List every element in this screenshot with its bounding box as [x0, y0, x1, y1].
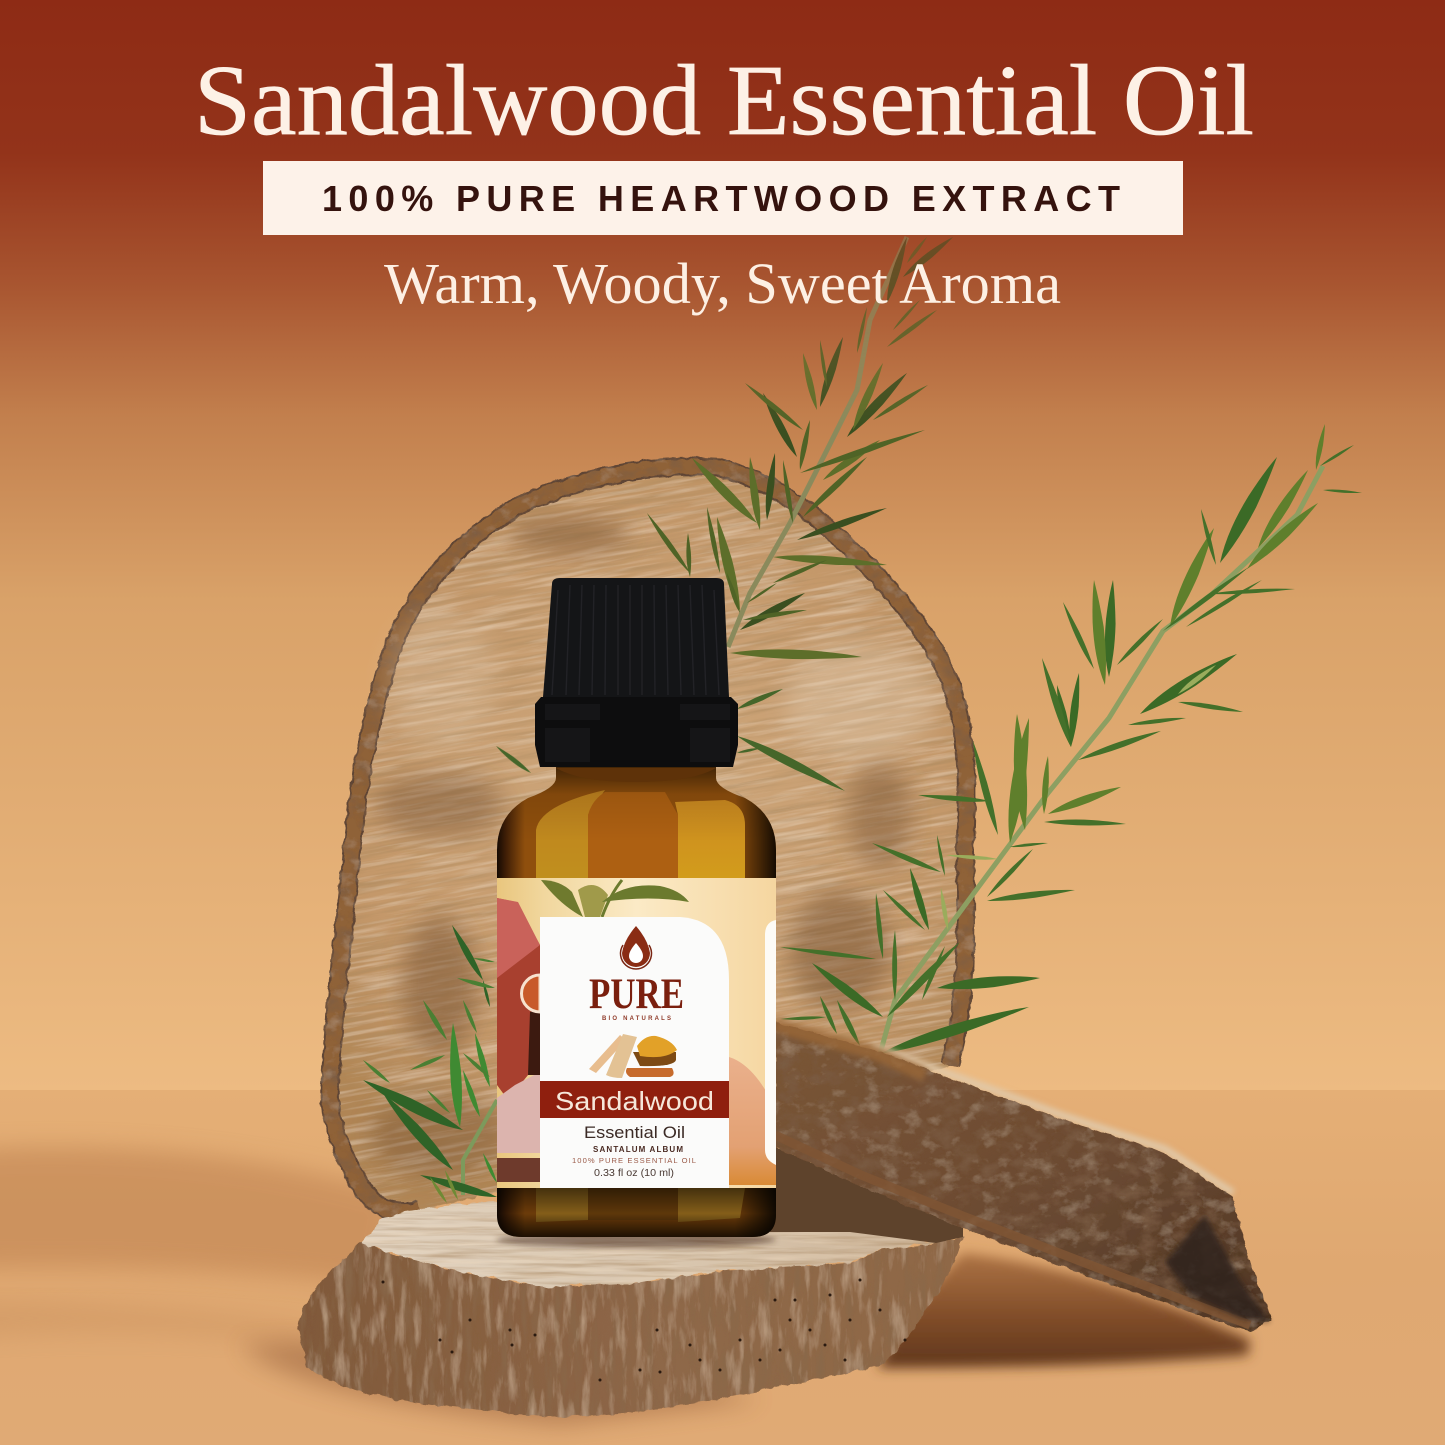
slab shaded face — [770, 1147, 963, 1243]
leaning slab fibres — [775, 1025, 925, 1075]
bottle — [496, 578, 776, 1248]
label white side tab — [765, 920, 776, 1165]
label art: burlap — [729, 1057, 776, 1185]
background wall — [0, 0, 1445, 1092]
slab wood pores — [383, 1280, 905, 1380]
bottle contact shadow — [496, 1232, 776, 1248]
aroma tagline: Warm, Woody, Sweet Aroma — [384, 251, 1061, 316]
tabletop surface — [0, 1090, 1445, 1445]
icon: sandalwood sticks and powder — [589, 1034, 677, 1078]
bottom wood slab — [298, 1147, 963, 1417]
leaning slab cream edge — [872, 1046, 1233, 1193]
label art: leaves — [541, 880, 689, 917]
disc cut face — [202, 358, 1094, 1321]
white label panel — [540, 917, 729, 1188]
label art: sandalwood chunks — [497, 898, 540, 1182]
black ribbed cap — [543, 578, 729, 697]
subtitle banner text: 100% PURE HEARTWOOD EXTRACT — [322, 178, 1120, 219]
leaning slab bark — [775, 1022, 1272, 1332]
title: Sandalwood Essential Oil — [194, 44, 1254, 156]
product name: Sandalwood — [555, 1086, 714, 1116]
disc bark rim — [330, 467, 966, 1212]
right sprig — [780, 423, 1362, 1059]
purity statement: 100% PURE ESSENTIAL OIL — [572, 1156, 696, 1165]
slab bark side — [298, 1237, 963, 1417]
brand logo drop — [620, 926, 652, 969]
botanical name: SANTALUM ALBUM — [593, 1145, 683, 1154]
subtitle banner — [263, 161, 1183, 235]
leaning wood slab — [775, 1022, 1272, 1332]
product type: Essential Oil — [584, 1124, 685, 1142]
product name band — [540, 1081, 729, 1118]
volume: 0.33 fl oz (10 ml) — [594, 1168, 674, 1179]
amber glass body — [497, 766, 776, 1237]
brand tagline: BIO NATURALS — [602, 1016, 671, 1022]
brand name: PURE — [589, 971, 684, 1018]
dropper collar — [535, 697, 738, 767]
slab cut face — [360, 1190, 936, 1287]
leaning slab dark tip — [1165, 1215, 1270, 1322]
disc shadows and highlights — [370, 515, 935, 1175]
leaning slab underside — [775, 1135, 1250, 1325]
lower left sprig — [360, 924, 498, 1204]
rear wood disc — [202, 358, 1094, 1321]
floor shadows — [0, 1147, 1250, 1425]
outer label background — [497, 878, 776, 1188]
rear sprig: top branch — [494, 234, 955, 794]
